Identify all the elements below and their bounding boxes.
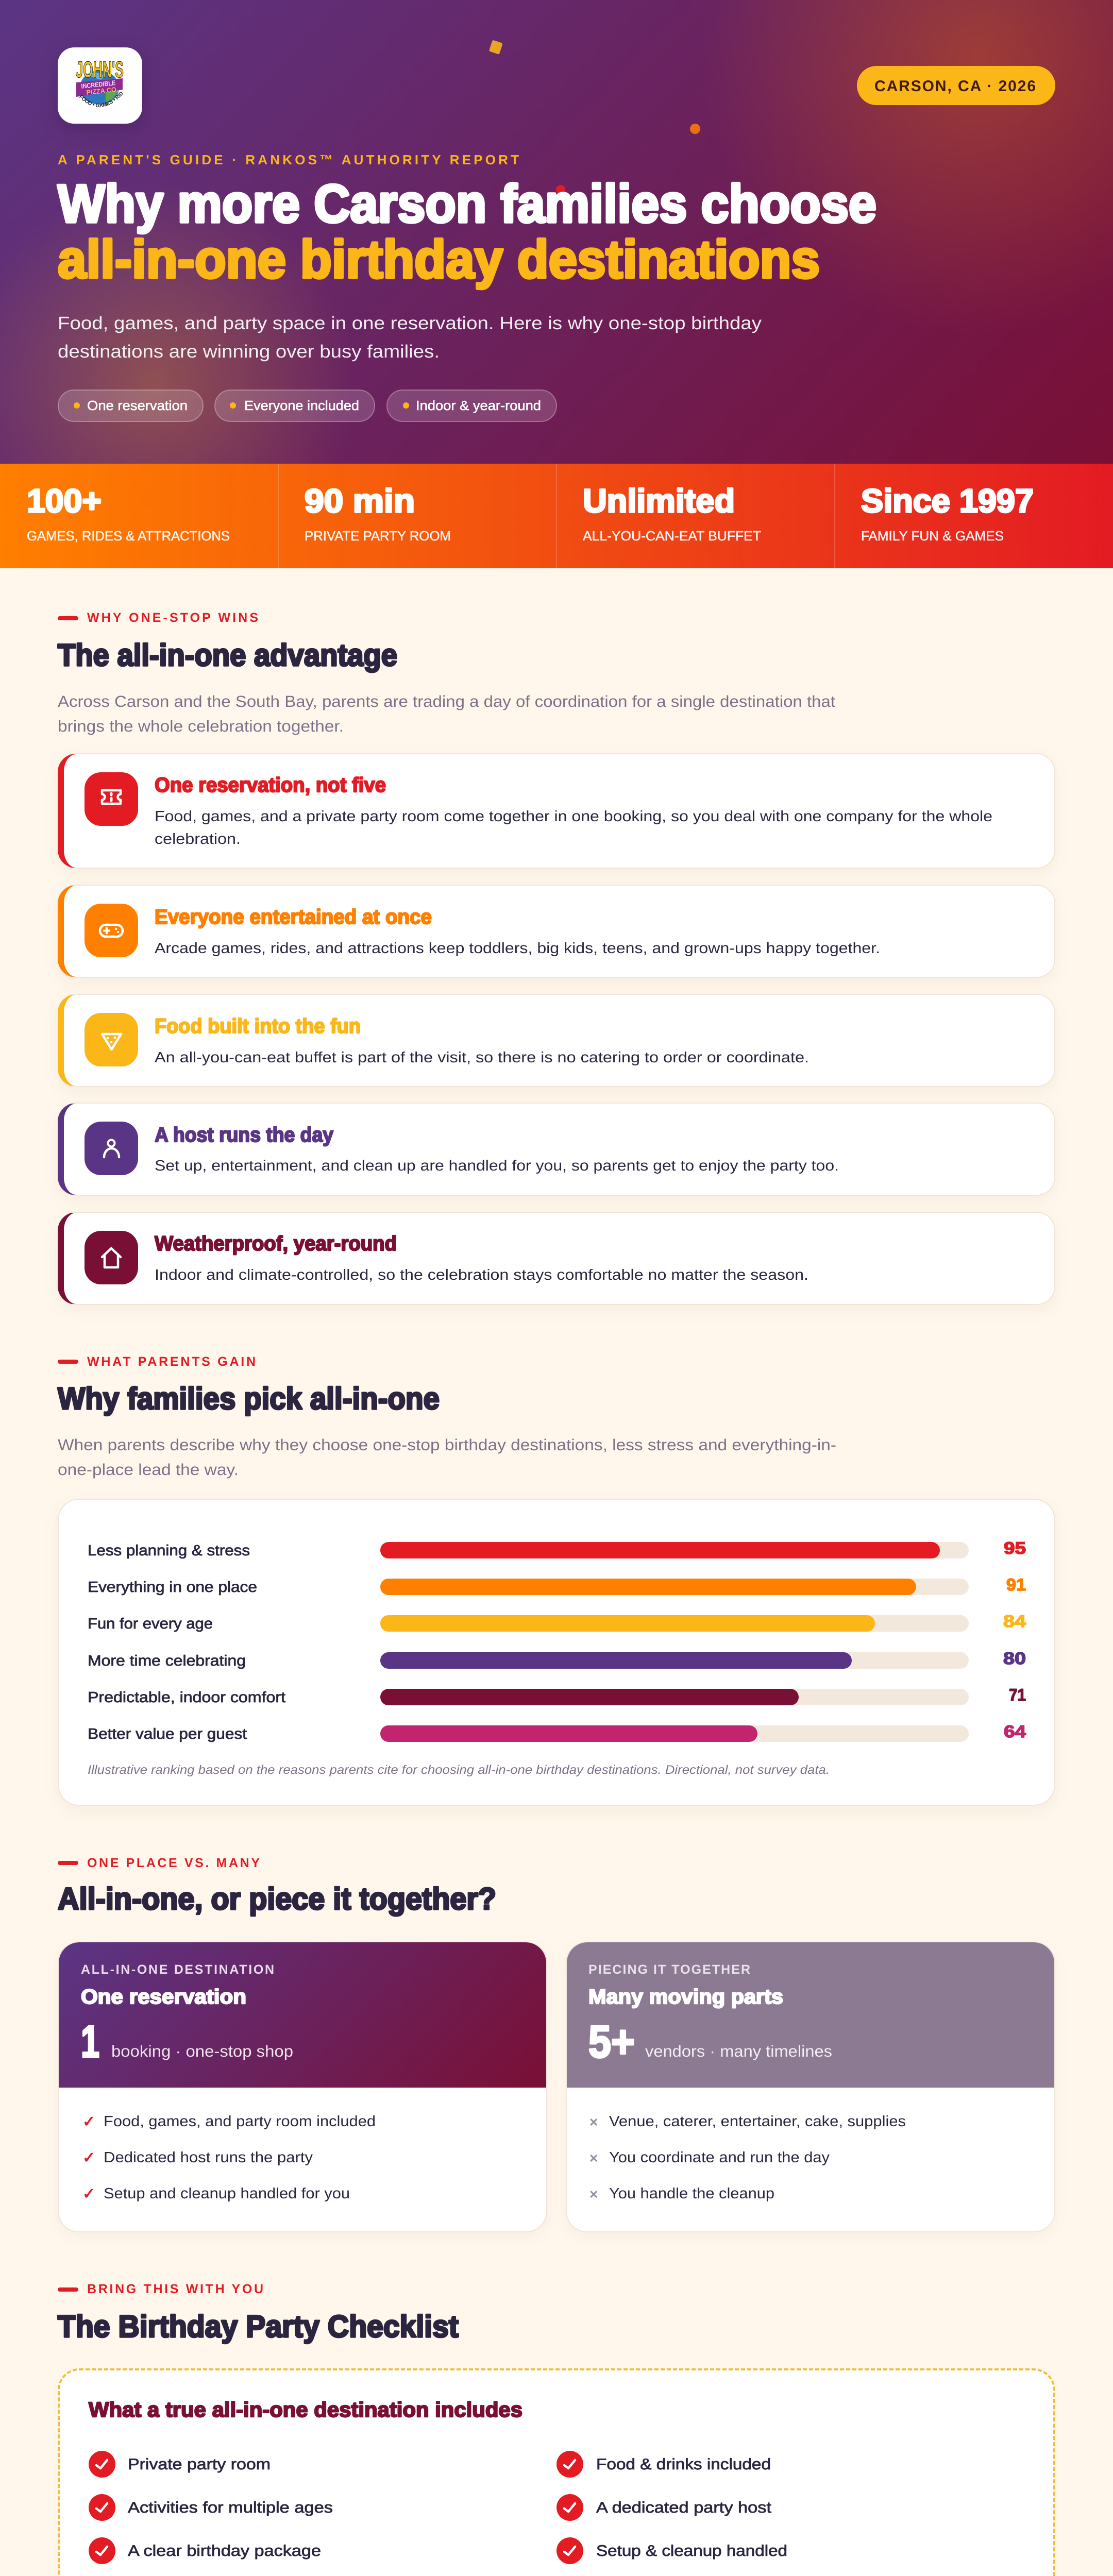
bar: fun for every age: Fun for every age bbox=[88, 1616, 213, 1632]
bar: everything in one place bbox=[88, 1575, 1026, 1596]
stat: since 1997: Since 1997 bbox=[861, 482, 1034, 519]
pill: one reservation: One reservation bbox=[87, 398, 188, 413]
brand logo bbox=[56, 47, 143, 130]
list: all-in-one benefits: ✓ bbox=[82, 2149, 95, 2167]
section heading: comparison: All-in-one, or piece it together? bbox=[58, 1882, 496, 1916]
hero subtitle: destinations are winning over busy families. bbox=[58, 342, 440, 362]
pill: everyone included: Everyone included bbox=[244, 398, 359, 413]
section eyebrow: one place vs many: ONE PLACE VS. MANY bbox=[87, 1856, 260, 1870]
section description: why families bbox=[58, 1436, 836, 1479]
eyebrow: A PARENT'S GUIDE · RANKOS™ AUTHORITY REPORT bbox=[58, 152, 519, 167]
panel: all-in-one destination bbox=[58, 1942, 547, 2232]
panel: piecing it together: PIECING IT TOGETHER bbox=[588, 1962, 750, 1977]
icon: house bbox=[85, 1231, 138, 1284]
pill: indoor and year-round bbox=[387, 390, 556, 421]
bar: more time celebrating: 80 bbox=[1003, 1649, 1026, 1668]
item: birthday package: A clear birthday package bbox=[128, 2543, 321, 2560]
bar: less planning: Less planning & stress bbox=[88, 1543, 250, 1559]
stat: games bbox=[27, 482, 230, 544]
section description: advantage: Across Carson and the South Bay, parents are trading a day of coordination for a single destination that bbox=[58, 692, 835, 710]
panel: piecing it together bbox=[566, 1942, 1055, 2232]
card body: An all-you-can-eat buffet is part of the visit, so there is no catering to order or coordinate. bbox=[155, 1049, 809, 1066]
section heading: advantage: The all-in-one advantage bbox=[58, 638, 397, 672]
section description: advantage: brings the whole celebration together. bbox=[58, 717, 344, 735]
card body: Arcade games, rides, and attractions keep toddlers, big kids, teens, and grown-ups happy together. bbox=[155, 940, 880, 957]
list: piecemeal drawbacks: ✕ bbox=[589, 2189, 598, 2201]
item: food and drinks: Food & drinks included bbox=[596, 2456, 771, 2473]
bar: everything in one place: 91 bbox=[1006, 1575, 1026, 1594]
brand logo: JOHN'S bbox=[76, 57, 124, 82]
panel: piecing it together: 5+ bbox=[588, 2016, 635, 2067]
section eyebrow: what parents gain: WHAT PARENTS GAIN bbox=[87, 1354, 256, 1369]
pill: indoor and year-round: Indoor & year-round bbox=[416, 398, 541, 413]
panel: piecing it together: vendors · many timelines bbox=[645, 2042, 832, 2060]
checklist title: What a true all-in-one destination includes bbox=[89, 2398, 522, 2421]
stat: buffet: Unlimited bbox=[583, 482, 735, 519]
list: piecemeal drawbacks: You handle the cleanup bbox=[609, 2185, 774, 2202]
title: all-in-one birthday destinations bbox=[58, 230, 820, 290]
bar: better value: Better value per guest bbox=[88, 1726, 247, 1742]
card title: A host runs the day bbox=[155, 1124, 334, 1146]
location badge bbox=[857, 66, 1055, 105]
item: dedicated host bbox=[556, 2494, 772, 2521]
item: setup and cleanup bbox=[556, 2537, 787, 2564]
brand logo: INCREDIBLE bbox=[81, 79, 116, 90]
card: one reservation bbox=[58, 753, 1055, 869]
panel: checklist bbox=[59, 2369, 1054, 2576]
list: all-in-one benefits: Dedicated host runs the party bbox=[104, 2149, 313, 2166]
item: private party room bbox=[89, 2451, 271, 2478]
list: all-in-one benefits: Food, games, and party room included bbox=[104, 2113, 376, 2130]
card: everyone entertained bbox=[58, 885, 1055, 978]
section description: why families: one-place lead the way. bbox=[58, 1461, 239, 1479]
card title: Weatherproof, year-round bbox=[155, 1232, 397, 1255]
panel: all-in-one destination: 1 bbox=[81, 2016, 99, 2067]
panel: all-in-one destination: One reservation bbox=[81, 1986, 246, 2008]
icon: pizza slice bbox=[85, 1013, 138, 1066]
bar: predictable indoor comfort: Predictable, indoor comfort bbox=[88, 1689, 285, 1706]
hero banner bbox=[0, 0, 1113, 464]
stat: games: 100+ bbox=[27, 482, 102, 519]
card: a host runs the day bbox=[58, 1103, 1055, 1196]
list: all-in-one benefits: ✓ bbox=[82, 2185, 95, 2203]
chart footnote: Illustrative ranking based on the reasons parents cite for choosing all-in-one birthday destinations. Directional, not survey data. bbox=[88, 1763, 830, 1777]
section description: why families: When parents describe why they choose one-stop birthday destinations, less stress and everything-in- bbox=[58, 1436, 836, 1454]
list: all-in-one benefits bbox=[82, 2113, 376, 2203]
panel: all-in-one destination: ALL-IN-ONE DESTINATION bbox=[81, 1962, 274, 1977]
card body bbox=[155, 808, 992, 848]
list: piecemeal drawbacks: Venue, caterer, entertainer, cake, supplies bbox=[609, 2113, 906, 2130]
card: weatherproof bbox=[58, 1212, 1055, 1305]
stat: party room bbox=[305, 482, 451, 544]
stat: since 1997 bbox=[861, 482, 1034, 544]
title bbox=[58, 174, 876, 290]
bar: predictable indoor comfort: 71 bbox=[1009, 1685, 1026, 1704]
pill: one reservation bbox=[58, 390, 203, 421]
list: piecemeal drawbacks: ✕ bbox=[589, 2153, 598, 2165]
bar: more time celebrating: More time celebrating bbox=[88, 1653, 246, 1669]
card body: Indoor and climate-controlled, so the celebration stays comfortable no matter the season. bbox=[155, 1267, 808, 1283]
card body: Food, games, and a private party room come together in one booking, so you deal with one company for the whole bbox=[155, 808, 992, 825]
bar: better value bbox=[88, 1722, 1026, 1742]
list: piecemeal drawbacks bbox=[589, 2113, 906, 2202]
panel: piecing it together: Many moving parts bbox=[588, 1986, 783, 2008]
brand logo: PIZZA CO. bbox=[86, 86, 119, 96]
bar: less planning: 95 bbox=[1004, 1538, 1026, 1557]
stat: party room: PRIVATE PARTY ROOM bbox=[305, 528, 451, 544]
section eyebrow: bring this with you: BRING THIS WITH YOU bbox=[87, 2282, 263, 2296]
card body: celebration. bbox=[155, 831, 241, 848]
card title: Everyone entertained at once bbox=[155, 906, 432, 928]
card: food built in bbox=[58, 994, 1055, 1087]
bar: everything in one place: Everything in one place bbox=[88, 1579, 257, 1596]
stat: games: GAMES, RIDES & ATTRACTIONS bbox=[27, 528, 230, 544]
stat: buffet: ALL-YOU-CAN-EAT BUFFET bbox=[583, 528, 761, 544]
hero subtitle bbox=[58, 313, 762, 362]
title: Why more Carson families choose bbox=[58, 174, 876, 234]
item: setup and cleanup: Setup & cleanup handled bbox=[596, 2543, 787, 2560]
item: birthday package bbox=[89, 2537, 321, 2564]
pill: everyone included bbox=[215, 390, 375, 421]
stat: party room: 90 min bbox=[305, 482, 415, 519]
item: activities bbox=[89, 2494, 333, 2521]
list: piecemeal drawbacks: You coordinate and run the day bbox=[609, 2149, 830, 2166]
section description: advantage bbox=[58, 692, 835, 735]
stat: buffet bbox=[583, 482, 761, 544]
panel: all-in-one destination: booking · one-stop shop bbox=[111, 2042, 293, 2060]
bar: fun for every age: 84 bbox=[1003, 1612, 1026, 1631]
card title: Food built into the fun bbox=[155, 1015, 361, 1038]
item: food and drinks bbox=[556, 2451, 771, 2478]
hero subtitle: Food, games, and party space in one reservation. Here is why one-stop birthday bbox=[58, 313, 762, 333]
bar chart panel bbox=[58, 1499, 1055, 1805]
card title: One reservation, not five bbox=[155, 774, 386, 796]
list: all-in-one benefits: Setup and cleanup handled for you bbox=[104, 2185, 350, 2202]
item: private party room: Private party room bbox=[128, 2456, 271, 2473]
section heading: checklist: The Birthday Party Checklist bbox=[58, 2309, 459, 2344]
bar: predictable indoor comfort bbox=[88, 1685, 1026, 1706]
list: all-in-one benefits: ✓ bbox=[82, 2113, 95, 2131]
icon: person bbox=[85, 1122, 138, 1175]
icon: ticket bbox=[85, 772, 138, 826]
bar: more time celebrating bbox=[88, 1649, 1026, 1669]
section heading: why families: Why families pick all-in-one bbox=[58, 1381, 440, 1416]
stats strip bbox=[0, 464, 1113, 568]
icon: game controller bbox=[85, 904, 138, 957]
bar: fun for every age bbox=[88, 1612, 1026, 1632]
bar: better value: 64 bbox=[1004, 1722, 1026, 1741]
stat: since 1997: FAMILY FUN & GAMES bbox=[861, 528, 1004, 544]
item: dedicated host: A dedicated party host bbox=[596, 2499, 772, 2516]
list: piecemeal drawbacks: ✕ bbox=[589, 2116, 598, 2129]
location badge: CARSON, CA · 2026 bbox=[874, 78, 1036, 95]
section eyebrow: why one-stop wins: WHY ONE-STOP WINS bbox=[87, 611, 258, 625]
card body: Set up, entertainment, and clean up are handled for you, so parents get to enjoy the party too. bbox=[155, 1158, 839, 1174]
bar: less planning bbox=[88, 1538, 1026, 1559]
item: activities: Activities for multiple ages bbox=[128, 2499, 333, 2516]
